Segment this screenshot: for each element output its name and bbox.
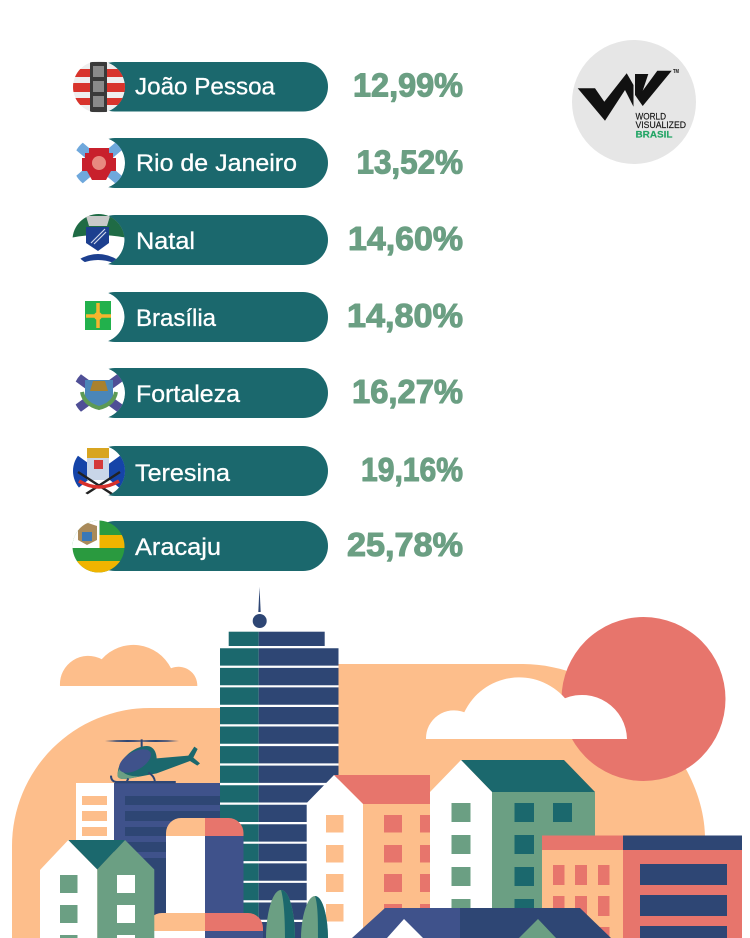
logo: World Visualized Brasil: BRASIL xyxy=(636,129,673,140)
ranking row: Fortaleza xyxy=(73,367,463,419)
helicopter xyxy=(105,739,200,783)
houses: left pair xyxy=(40,840,154,938)
building: rounded tower xyxy=(147,818,263,938)
flag: Teresina xyxy=(73,447,125,496)
ranking row: Rio de Janeiro xyxy=(73,137,463,189)
ranking row: Brasília: 14,80% xyxy=(347,297,463,334)
ranking row: João Pessoa xyxy=(70,61,463,113)
building: bottom roof xyxy=(352,908,611,938)
ranking row: Aracaju xyxy=(72,520,463,572)
building: green house with teal roof xyxy=(430,760,595,938)
ranking row: Rio de Janeiro: Rio de Janeiro xyxy=(136,150,297,177)
background hill xyxy=(12,664,705,938)
ranking row: Rio de Janeiro: 13,52% xyxy=(356,143,463,180)
flag: João Pessoa xyxy=(73,61,125,113)
ranking row: Aracaju: 25,78% xyxy=(347,526,463,563)
sun xyxy=(562,617,726,781)
ranking row: Natal: 14,60% xyxy=(348,220,463,257)
cloud: peach xyxy=(60,645,197,686)
logo: World Visualized Brasil xyxy=(572,40,696,164)
ranking row: Teresina: Teresina xyxy=(135,460,231,487)
ranking row: Fortaleza: 16,27% xyxy=(352,373,463,410)
flag: Fortaleza xyxy=(76,369,125,418)
flag: Rio de Janeiro xyxy=(76,139,125,188)
ranking row: Brasília xyxy=(72,291,463,343)
building: right house with coral roof xyxy=(307,775,430,938)
cityscape illustration xyxy=(12,587,742,938)
ranking row: Brasília: Brasília xyxy=(136,305,217,332)
ranking row: João Pessoa: 12,99% xyxy=(353,67,463,104)
cloud: white xyxy=(426,677,627,739)
flag: Natal xyxy=(72,214,124,264)
ranking row: Natal xyxy=(70,212,463,266)
building: rooftop block xyxy=(76,783,220,938)
ranking row: Natal: Natal xyxy=(136,228,195,255)
logo: World Visualized Brasil: WORLD xyxy=(636,111,666,122)
tower xyxy=(220,587,338,938)
ranking row: Teresina: 19,16% xyxy=(361,451,463,488)
flag: Aracaju xyxy=(72,520,124,572)
logo mark: TM xyxy=(673,69,679,75)
ranking row: João Pessoa: João Pessoa xyxy=(135,73,276,100)
flag: Brasília xyxy=(85,293,124,341)
trees xyxy=(266,890,328,938)
ranking row: Fortaleza: Fortaleza xyxy=(136,381,241,408)
ranking row: Teresina xyxy=(70,445,463,497)
building: peach and coral block xyxy=(542,836,742,938)
ranking row: Aracaju: Aracaju xyxy=(135,534,221,561)
logo: World Visualized Brasil: VISUALIZED xyxy=(636,120,686,131)
